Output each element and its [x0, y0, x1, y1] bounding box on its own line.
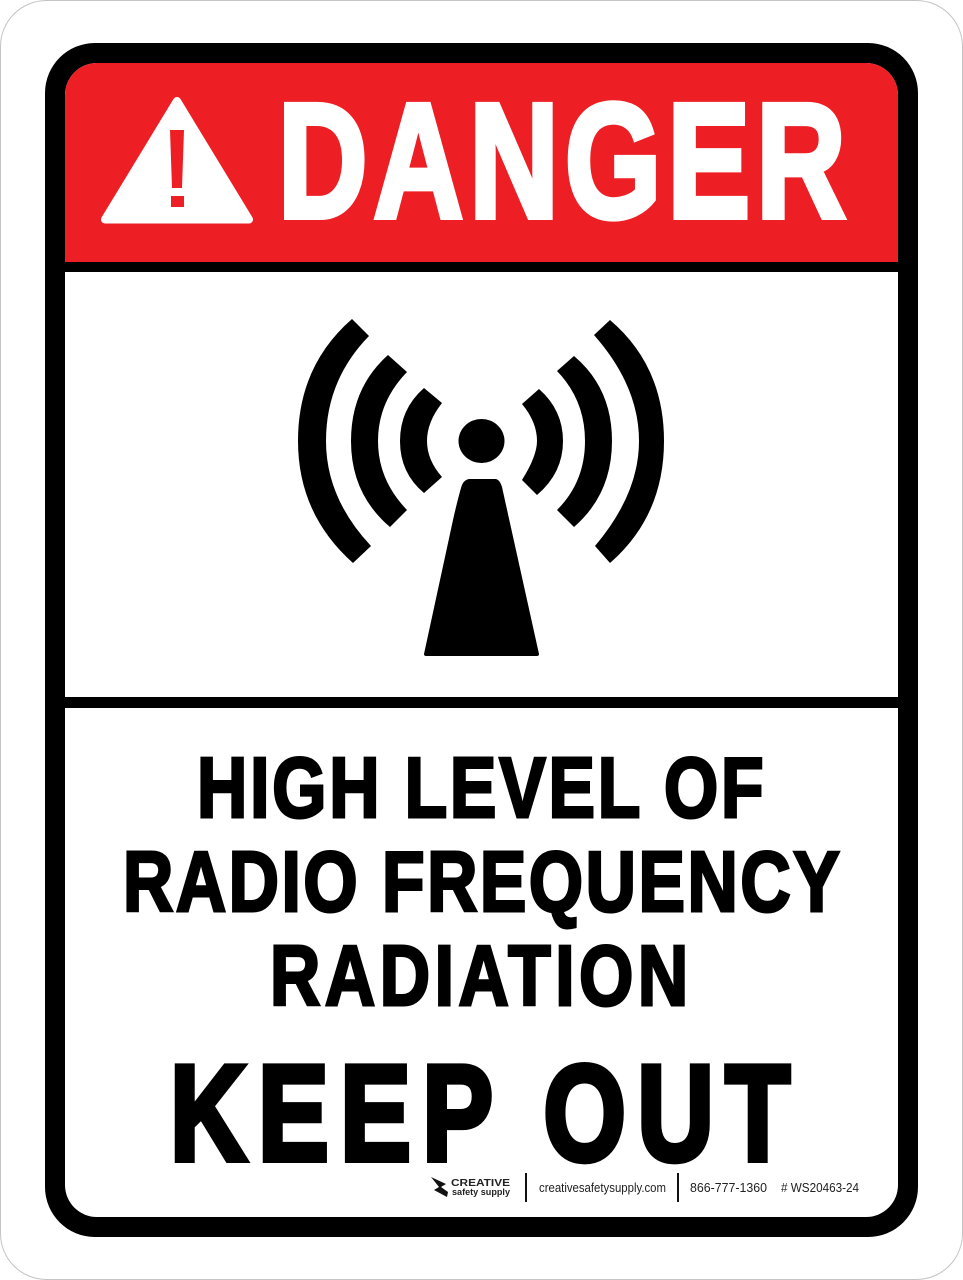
antenna mast	[424, 479, 539, 656]
right radio waves	[522, 320, 664, 563]
heading: DANGER: DANGER	[278, 70, 846, 252]
footer separator one	[525, 1173, 527, 1202]
header divider	[65, 262, 898, 272]
footer separator two	[677, 1173, 679, 1202]
icon: radio frequency antenna	[298, 319, 664, 656]
brand name: safety supply	[452, 1187, 510, 1197]
website: creativesafetysupply.com	[539, 1181, 666, 1195]
message text	[123, 742, 840, 1189]
brand name: CREATIVE	[451, 1178, 510, 1189]
brand name	[451, 1178, 510, 1197]
text: RADIO FREQUENCY: RADIO FREQUENCY	[123, 836, 840, 930]
left radio waves	[298, 319, 442, 563]
text: KEEP OUT: KEEP OUT	[170, 1037, 790, 1189]
text: RADIATION: RADIATION	[270, 930, 688, 1024]
product code: # WS20463-24	[781, 1181, 859, 1195]
footer: supplier details	[431, 1173, 859, 1202]
phone number: 866-777-1360	[690, 1181, 767, 1195]
section divider	[65, 697, 898, 708]
icon: warning triangle	[105, 101, 249, 220]
antenna head	[458, 419, 504, 463]
panel: white sign interior	[65, 63, 898, 1217]
icon: creative safety supply logo	[431, 1177, 448, 1197]
exclamation mark	[170, 130, 184, 207]
text: HIGH LEVEL OF: HIGH LEVEL OF	[197, 742, 764, 836]
panel: red danger header	[65, 63, 898, 262]
